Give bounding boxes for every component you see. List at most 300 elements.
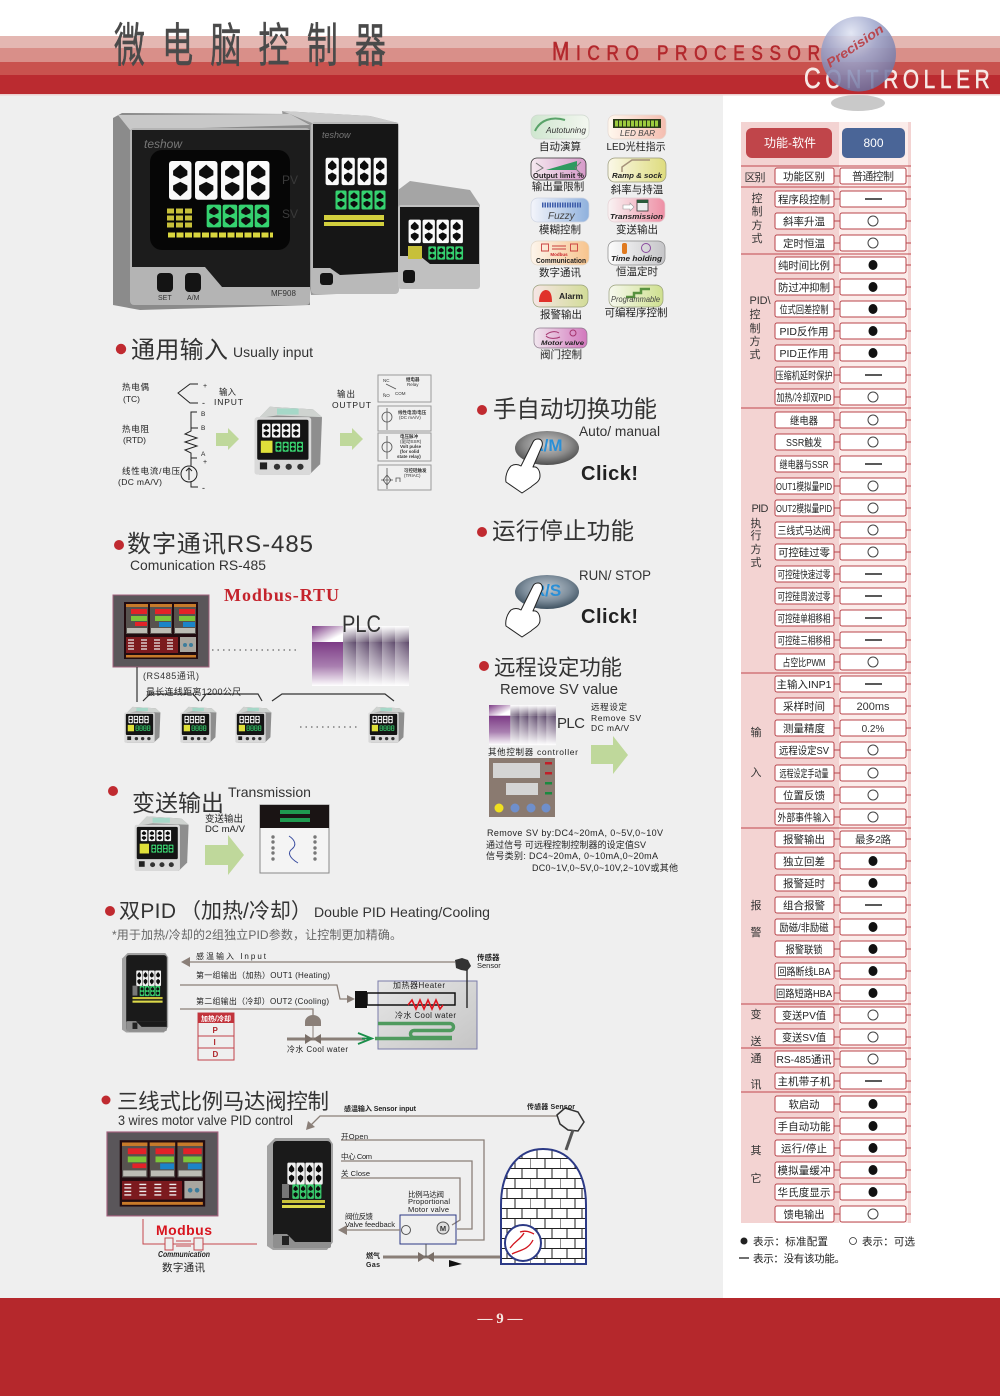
sensor: Sensor (477, 961, 501, 970)
row: 可控硅单相移相 (775, 610, 911, 626)
sensor: 传感器 (477, 952, 500, 962)
row: RS-485通讯: RS-485通讯 (776, 1053, 832, 1066)
controller chain (124, 707, 404, 743)
input wiring labels: INPUT (214, 397, 243, 407)
badge: Autotuning (531, 115, 589, 153)
row: 测量精度 (775, 720, 911, 736)
row: 回路短路HBA: 回路短路HBA (776, 987, 832, 1000)
other controller: 其他控制器 controller (488, 747, 578, 757)
row: 可控硅快速过零: 可控硅快速过零 (778, 568, 831, 581)
row: 软启动 (775, 1096, 911, 1112)
header band (0, 36, 1000, 96)
output type boxes: 线性电流/电压 (398, 409, 427, 416)
input wiring labels: + (203, 383, 207, 390)
PID parameter table: P (212, 1026, 218, 1035)
row: 外部事件输入 (775, 809, 911, 825)
output type boxes: NO (383, 393, 390, 398)
badge: Communication: Communication (536, 258, 586, 265)
precision sphere (821, 16, 896, 111)
row: 手自动功能 (775, 1118, 911, 1134)
group labels: 变 (750, 1007, 762, 1021)
badge: Programmable: 可编程序控制 (604, 306, 668, 319)
row: 继电器与SSR: 继电器与SSR (780, 458, 829, 471)
row: 压缩机延时保护 (775, 367, 911, 383)
row: 主输入INP1: 主输入INP1 (776, 678, 832, 691)
row: 纯时间比例 (775, 257, 911, 273)
Modbus communication: Communication (158, 1249, 210, 1259)
remote label (591, 702, 641, 733)
badge: LED BAR (606, 115, 666, 153)
group labels: 式 (752, 232, 762, 245)
gas line: 燃气 (366, 1251, 380, 1260)
controller medium (282, 111, 399, 295)
valve box: 阀位反馈 (345, 1211, 374, 1221)
row: 继电器: 继电器 (790, 414, 818, 427)
sensor input line (306, 1102, 575, 1130)
group labels: 控 (752, 191, 762, 205)
badge: Ramp & sock: Ramp & sock (612, 171, 663, 180)
input wiring labels: 输出 (337, 389, 355, 399)
controller large: PV (282, 173, 298, 187)
row: 励磁/非励磁 (775, 919, 911, 935)
group labels: 式 (750, 556, 762, 569)
row: 可控硅过零 (775, 544, 911, 560)
row: 独立回差: 独立回差 (783, 855, 825, 868)
tall controller (122, 953, 168, 1033)
remote SV description: DC0~1V,0~5V,0~10V,2~10V或其他 (532, 862, 678, 873)
row: 报警延时: 报警延时 (783, 877, 826, 890)
heading: 数字通讯RS-485: Comunication RS-485 (130, 557, 266, 573)
table legend (739, 1235, 916, 1265)
group labels: 讯 (750, 1078, 762, 1091)
section: usually input (116, 337, 431, 493)
row: 可控硅周波过零 (775, 588, 911, 604)
table header: 功能-软件 (746, 128, 832, 158)
section: auto manual (477, 396, 660, 493)
remote label: DC mA/V (591, 723, 629, 733)
output type boxes: Relay (407, 382, 419, 387)
row: PID正作用 (775, 345, 911, 361)
output type boxes: (TRIAC) (404, 473, 421, 478)
sensor input line: 传感器 Sensor (527, 1102, 575, 1111)
badge: Alarm: 报警输出 (540, 308, 582, 321)
badge: Output limit (531, 158, 586, 193)
group labels: 警 (750, 925, 762, 939)
badge: Ramp & sock: 斜率与持温 (611, 183, 664, 196)
PID parameter table (198, 1013, 234, 1060)
remote label: Remove SV (591, 713, 641, 723)
group labels: 输 (750, 725, 762, 739)
click text: Click! (581, 606, 638, 628)
row: 位式回差控制 (775, 301, 911, 317)
input wiring labels: B (201, 425, 205, 432)
arrow (205, 835, 244, 875)
badge: Communication: 数字通讯 (539, 266, 581, 279)
badge: Motor valve: Motor valve (541, 340, 584, 347)
row: 防过冲抑制 (775, 279, 911, 295)
row: 纯时间比例: 纯时间比例 (778, 259, 830, 272)
group labels: PID\ (750, 295, 771, 307)
transmission label: 变送输出 (205, 813, 243, 825)
heading: 变送输出 (108, 784, 311, 816)
feature badges (531, 115, 668, 361)
row: 变送SV值: 变送SV值 (782, 1031, 826, 1044)
row: 变送PV值 (775, 1007, 911, 1023)
heading: 运行停止功能 (477, 518, 651, 583)
output type boxes: NC (383, 378, 390, 383)
control wires: 中心 Com (341, 1151, 372, 1161)
output type boxes: (for solid (400, 449, 419, 454)
row: OUT2模拟量PID (775, 500, 911, 516)
remote label: 远程设定 (591, 702, 627, 712)
arrow: output (340, 428, 363, 450)
footer band with page number: — 9 — (476, 1311, 524, 1327)
row: PID反作用: PID反作用 (780, 326, 828, 338)
row: 可控硅周波过零: 可控硅周波过零 (778, 590, 831, 603)
row: 励磁/非励磁: 励磁/非励磁 (780, 921, 829, 934)
title: 微电脑控制器: 微电脑控制器 (114, 9, 386, 76)
badge: Fuzzy: 模糊控制 (539, 223, 581, 236)
badge: Alarm: Alarm (559, 292, 583, 301)
row: SSR触发 (775, 434, 911, 450)
row: 模拟量缓冲 (775, 1162, 911, 1178)
heater box: 冷水 Cool water (395, 1010, 456, 1020)
row: PID正作用: PID正作用 (780, 348, 828, 360)
heading: 手自动切换功能 (477, 396, 660, 439)
output type boxes: (DC mA/V) (399, 415, 421, 420)
Modbus communication: Modbus (156, 1222, 212, 1238)
row: 主输入INP1 (775, 676, 911, 692)
row: 采样时间: 200ms (856, 701, 890, 713)
group labels: 行 (750, 529, 762, 542)
row: 远程设定手动量: 远程设定手动量 (780, 767, 829, 780)
badge: Transmission: Transmission (610, 214, 663, 221)
row: 位置反馈: 位置反馈 (783, 789, 826, 802)
group labels: 报 (750, 898, 762, 912)
row: OUT2模拟量PID: OUT2模拟量PID (776, 502, 832, 515)
heading: 三线式比例马达阀控制 (102, 1090, 329, 1128)
heading: 通用输入: Usually input (233, 344, 313, 360)
valve box (338, 1189, 456, 1244)
row: 回路短路HBA (775, 985, 911, 1001)
heater box: 加热器Heater (393, 980, 445, 990)
PLC block: PLC (557, 715, 585, 732)
heading: 三线式比例马达阀控制: 3 wires motor valve PID control (118, 1112, 293, 1128)
section: 3 wire motor valve (102, 1090, 586, 1274)
sensor input line: 感温输入 Sensor input (344, 1104, 417, 1113)
row: 独立回差 (775, 853, 911, 869)
remote SV description: Remove SV by:DC4~20mA, 0~5V,0~10V (487, 828, 663, 838)
table legend: 表示：没有该功能。 (753, 1252, 845, 1265)
badge: Motor valve (534, 328, 587, 361)
section dividers (741, 166, 911, 1092)
remote SV description (486, 828, 678, 873)
row: 报警联锁: 报警联锁 (786, 943, 823, 956)
table header: 800: 800 (863, 136, 884, 150)
row: 斜率升温: 斜率升温 (783, 215, 826, 228)
tall controller (267, 1138, 333, 1250)
badge: Programmable: Programmable (611, 295, 661, 304)
heading: 远程设定功能 (479, 656, 622, 698)
badge: Communication: Modbus (550, 252, 568, 257)
row: 报警输出 (775, 831, 911, 847)
section: remote SV (479, 656, 678, 873)
title english: Micro Processor: M ICRO PROCESSOR (552, 37, 820, 66)
row: 报警输出: 报警输出 (783, 833, 825, 846)
heading: 双PID: 双PID (119, 900, 176, 923)
badge: Fuzzy (531, 198, 589, 236)
sensor (455, 952, 501, 1008)
table legend: 表示：标准配置 (753, 1235, 828, 1248)
row: OUT1模拟量PID: OUT1模拟量PID (776, 480, 832, 493)
row: 采样时间: 采样时间 (783, 700, 825, 713)
input wiring labels: A (201, 451, 206, 458)
row: 位式回差控制: 位式回差控制 (780, 303, 828, 316)
row: 组合报警: 组合报警 (783, 899, 826, 912)
note: *用于加热/冷却的2组独立PID参数，让控制更加精确。 (112, 927, 402, 942)
transmission label (205, 813, 246, 835)
arrow (591, 736, 628, 774)
control wires: 开Open (341, 1132, 368, 1141)
group labels: 制 (752, 205, 762, 218)
badge: Output limit: 输出量限制 (532, 180, 584, 193)
row: 组合报警 (775, 897, 911, 913)
group labels: 式 (750, 348, 760, 361)
badge: Ramp & sock (608, 158, 666, 196)
valve box: M (440, 1224, 446, 1233)
row: 主机带子机: 主机带子机 (778, 1075, 831, 1088)
gas line (366, 1244, 500, 1269)
group labels: 制 (750, 322, 760, 335)
row: 软启动: 软启动 (788, 1098, 820, 1111)
row: 三线式马达阀: 三线式马达阀 (778, 524, 830, 537)
Modbus communication (143, 1219, 257, 1274)
input wiring labels: 热电阻 (122, 424, 149, 434)
button: R/S with hand (506, 575, 579, 637)
badge: LED BAR: LED光柱指示 (606, 140, 666, 153)
group labels: 区别 (744, 171, 766, 184)
group labels: PID (752, 503, 769, 515)
output type boxes: 电压脉冲 (400, 433, 418, 440)
input wiring labels: (DC mA/V) (118, 477, 162, 487)
row: 外部事件输入: 外部事件输入 (778, 811, 831, 824)
group labels: 它 (750, 1171, 762, 1185)
group labels: 送 (750, 1034, 762, 1048)
heading: 双PID (105, 900, 490, 923)
cold water valve (287, 1015, 372, 1054)
remote SV description: 通过信号 可远程控制控制器的设定值SV (486, 839, 646, 850)
section: run stop (477, 518, 651, 637)
row: 程序段控制: 程序段控制 (778, 193, 830, 206)
badge: Time holding (608, 241, 665, 278)
output type boxes: COM (395, 391, 406, 396)
HMI panel (113, 595, 209, 667)
button: A/M with hand: A/M (531, 436, 563, 455)
row: 功能区别: 功能区别 (783, 170, 825, 183)
row: 回路断线LBA (775, 963, 911, 979)
row: 报警延时 (775, 875, 911, 891)
controller small (398, 181, 480, 289)
signal lines (180, 951, 455, 1018)
row: 主机带子机 (775, 1073, 911, 1089)
row: 远程设定手动量 (775, 765, 911, 781)
row: 华氏度显示 (775, 1184, 911, 1200)
row: 压缩机延时保护: 压缩机延时保护 (776, 369, 832, 382)
gas line: Gas (366, 1262, 380, 1269)
row: 定时恒温: 定时恒温 (783, 237, 826, 250)
heading: 远程设定功能: 远程设定功能 (494, 656, 622, 680)
recorder (260, 805, 329, 873)
badge: Motor valve: 阀门控制 (540, 348, 582, 361)
heading: 运行停止功能: RUN/ STOP (579, 567, 651, 583)
valve box: Motor valve (408, 1205, 449, 1214)
row: 可控硅快速过零 (775, 566, 911, 582)
table background (741, 122, 911, 1223)
row: 加热/冷却双PID (775, 389, 911, 405)
input wiring labels: 线性电流/电压 (122, 466, 180, 476)
badge: Time holding: 恒温定时 (616, 265, 658, 278)
badge: Programmable (604, 285, 668, 319)
PLC block: PLC (342, 611, 381, 638)
group labels: 执 (750, 516, 762, 530)
group labels: 控 (750, 307, 760, 321)
heading: 手自动切换功能: Auto/ manual (579, 423, 660, 439)
badge: Alarm (533, 285, 588, 321)
valve box: Valve feedback (345, 1220, 395, 1229)
row: 馈电输出: 馈电输出 (784, 1208, 824, 1221)
PID parameter table: 加热/冷却 (201, 1014, 231, 1023)
row: 斜率升温 (775, 213, 911, 229)
table legend: 表示：可选 (862, 1235, 916, 1248)
Modbus communication: 数字通讯 (162, 1261, 206, 1274)
heading: 手自动切换功能: 手自动切换功能 (493, 396, 657, 422)
row: 回路断线LBA: 回路断线LBA (778, 965, 830, 978)
RS485 wiring: 最长连线距离1200公尺 (146, 686, 241, 697)
title english: Controller: CONTROLLER (804, 61, 990, 95)
valve box: Proportional (408, 1197, 450, 1206)
row: 运行/停止: 运行/停止 (781, 1142, 827, 1155)
row: PID反作用 (775, 323, 911, 339)
heading: 远程设定功能: Remove SV value (500, 681, 618, 698)
row: 变送SV值 (775, 1029, 911, 1045)
label: Modbus-RTU: Modbus-RTU (224, 585, 339, 605)
badge: Autotuning: 自动演算 (539, 140, 581, 153)
controller large: MF908 (271, 289, 296, 298)
badge: Communication (531, 241, 589, 279)
button: R/S with hand: R/S (533, 581, 561, 600)
row: 功能区别 (775, 168, 911, 184)
precision sphere: Precision (823, 21, 886, 70)
output type boxes (378, 375, 431, 490)
control wires: 关 Close (341, 1168, 370, 1178)
row: 占空比PWM (775, 654, 911, 670)
row: 模拟量缓冲: 模拟量缓冲 (778, 1164, 830, 1177)
badge: Time holding: Time holding (611, 254, 662, 263)
input wiring labels: (TC) (123, 394, 140, 404)
controller large: A/M (187, 295, 200, 302)
row: 占空比PWM: 占空比PWM (782, 656, 826, 669)
heading: 数字通讯RS-485 (114, 531, 313, 573)
product photo: three controllers (113, 111, 480, 310)
group labels: 入 (750, 767, 762, 779)
row: 可控硅单相移相: 可控硅单相移相 (778, 612, 830, 625)
transmission label: DC mA/V (205, 824, 246, 835)
small controller: input output (254, 407, 322, 475)
group labels: 方 (750, 542, 762, 556)
table header: 800 (842, 128, 905, 158)
input wiring labels: (RTD) (123, 435, 146, 445)
RS485 wiring: (RS485通讯) (143, 671, 199, 681)
badge: Transmission (608, 198, 665, 236)
input wiring labels: 输入 (219, 387, 236, 397)
section: double PID (105, 900, 501, 1060)
row: 报警联锁 (775, 941, 911, 957)
input wiring labels: B (201, 411, 205, 418)
row: 继电器与SSR (775, 456, 911, 472)
row: 报警输出: 最多2路 (855, 833, 892, 846)
input wiring labels (118, 382, 371, 493)
footer band with page number (0, 1298, 1000, 1396)
row: 继电器 (775, 412, 911, 428)
row: 测量精度: 测量精度 (783, 722, 826, 735)
furnace (501, 1149, 586, 1264)
row: 位置反馈 (775, 787, 911, 803)
arrow: input (216, 428, 239, 450)
heading: 双PID: Double PID Heating/Cooling (314, 904, 490, 920)
row: 可控硅三相移相 (775, 632, 911, 648)
row: 运行/停止 (775, 1140, 911, 1156)
input wiring labels: - (202, 398, 205, 408)
controller large (113, 113, 310, 310)
heading: 变送输出: Transmission (228, 784, 311, 800)
group labels (744, 171, 771, 1185)
input wiring labels: + (203, 459, 207, 466)
PLC block (312, 611, 409, 686)
row: 测量精度: 0.2% (862, 724, 885, 735)
output type boxes: (驱动SSR) (400, 438, 422, 445)
output type boxes: 继电器 (406, 376, 420, 383)
control wires (341, 1132, 484, 1240)
row: 采样时间 (775, 698, 911, 714)
badge: Fuzzy: Fuzzy (548, 211, 576, 222)
sensor (557, 1108, 584, 1150)
input wiring labels: - (202, 483, 205, 493)
PID parameter table: D (212, 1050, 218, 1059)
row: 防过冲抑制: 防过冲抑制 (778, 281, 830, 294)
input wiring symbols (178, 384, 198, 487)
row: 变送PV值: 变送PV值 (782, 1009, 826, 1022)
row: 手自动功能: 手自动功能 (778, 1120, 831, 1133)
section: RS-485 (113, 531, 409, 743)
cold water valve: 冷水 Cool water (287, 1044, 348, 1054)
dotted link (212, 649, 300, 651)
group labels: 方 (752, 218, 762, 232)
heading: 通用输入 (116, 337, 313, 364)
heading: 变送输出: 变送输出 (132, 790, 224, 816)
controller medium: teshow (322, 130, 351, 140)
RS485 wiring (137, 667, 394, 702)
heading: 运行停止功能: 运行停止功能 (492, 518, 634, 544)
badge: Transmission: 变送输出 (616, 223, 658, 236)
row: 程序段控制 (775, 191, 911, 207)
row: 馈电输出 (775, 1206, 911, 1222)
controller large: SV (282, 207, 298, 221)
output type boxes: state relay) (397, 454, 421, 459)
feature comparison table (741, 122, 911, 1223)
row: 三线式马达阀 (775, 522, 911, 538)
input wiring labels: 热电偶 (122, 382, 149, 392)
badge: LED BAR: LED BAR (620, 129, 655, 138)
